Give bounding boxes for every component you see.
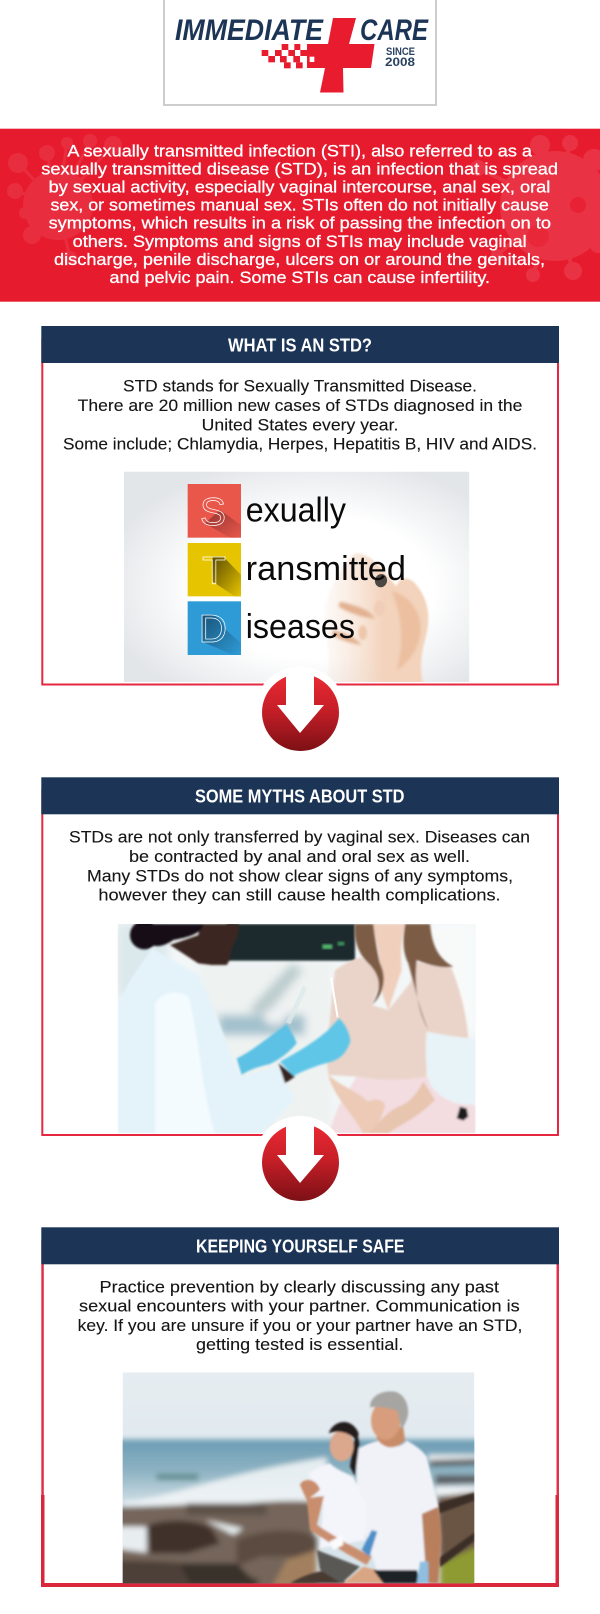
banner background	[0, 129, 600, 302]
logo	[164, 0, 436, 105]
hand	[325, 553, 428, 683]
woman	[350, 1433, 359, 1477]
intro banner	[0, 129, 600, 302]
block letters: S	[200, 491, 226, 534]
logo since: SINCE	[386, 46, 415, 58]
acronym words: exually	[246, 492, 346, 530]
panel heading bar	[41, 326, 559, 363]
panel text: Practice prevention by clearly discussing any past	[100, 1278, 499, 1296]
panel text	[69, 829, 530, 905]
panel text	[63, 378, 537, 454]
T block	[188, 543, 241, 596]
acronym words: iseases	[246, 608, 355, 646]
panel text: There are 20 million new cases of STDs diagnosed in the	[78, 397, 522, 415]
patient	[327, 924, 476, 1133]
arrow down 2	[254, 1116, 346, 1209]
panel text	[78, 1278, 522, 1354]
block letters	[201, 497, 226, 642]
panel text: United States every year.	[202, 416, 398, 434]
intro paragraph: and pelvic pain. Some STIs can cause infertility.	[110, 269, 490, 287]
logo red cross	[307, 18, 374, 92]
S block	[188, 484, 241, 538]
photo: couple by the sea	[113, 1372, 483, 1590]
virus left	[7, 134, 122, 265]
virus right	[470, 135, 600, 282]
panel outline	[42, 790, 558, 1135]
panel heading: KEEPING YOURSELF SAFE	[196, 1235, 404, 1256]
monitor	[227, 924, 355, 961]
intro paragraph: symptoms, which results in a risk of passing the infection on to	[49, 215, 551, 233]
intro paragraph: sexually transmitted disease (STD), is an infection that is spread	[41, 160, 558, 178]
panel text: STDs are not only transferred by vaginal sex. Diseases can	[69, 829, 530, 847]
intro paragraph: by sexual activity, especially vaginal intercourse, anal sex, oral	[49, 178, 550, 196]
panel text: STD stands for Sexually Transmitted Disease.	[123, 378, 477, 396]
logo frame	[164, 0, 436, 105]
panel text: getting tested is essential.	[196, 1336, 403, 1354]
block letters: T	[202, 550, 226, 593]
panel lower outline	[41, 1495, 559, 1587]
panel text: be contracted by anal and oral sex as well.	[129, 848, 470, 866]
intro paragraph: sex, or sometimes manual sex. STIs often do not initially cause	[50, 197, 549, 215]
logo wordmark: care: CARE	[360, 14, 429, 47]
panel heading: WHAT IS AN STD?	[228, 335, 372, 356]
photo: STD acronym with hand	[124, 472, 469, 683]
panel: keeping yourself safe	[41, 1227, 559, 1590]
intro paragraph: others. Symptoms and signs of STIs may include vaginal	[73, 233, 527, 251]
photo: doctor and patient	[118, 921, 476, 1133]
panel: what is an STD	[41, 326, 559, 684]
panel heading bar	[41, 1227, 559, 1264]
swab	[331, 977, 338, 1017]
panel text: key. If you are unsure if you or your partner have an STD,	[78, 1317, 522, 1335]
logo checker pattern	[262, 44, 314, 68]
D block	[188, 601, 241, 655]
arrow down 1	[254, 666, 346, 758]
panel text: Some include; Chlamydia, Herpes, Hepatitis B, HIV and AIDS.	[63, 436, 537, 454]
panel text: however they can still cause health complications.	[98, 887, 501, 905]
intro paragraph: A sexually transmitted infection (STI), also referred to as a	[67, 142, 533, 160]
intro paragraph: discharge, penile discharge, ulcers on or around the genitals,	[54, 251, 545, 269]
logo wordmark: immediate: IMMEDIATE	[175, 14, 324, 47]
panel: some myths about STD	[41, 777, 559, 1135]
acronym words: ransmitted	[246, 550, 406, 588]
panel outline	[41, 1240, 559, 1495]
panel heading bar	[41, 777, 559, 814]
log and legs	[290, 1570, 347, 1583]
panel text: Many STDs do not show clear signs of any symptoms,	[87, 867, 513, 885]
panel text: sexual encounters with your partner. Communication is	[79, 1298, 520, 1316]
panel outline	[42, 340, 558, 684]
marker tip	[374, 574, 388, 588]
block letters: D	[199, 608, 227, 651]
panel heading: SOME MYTHS ABOUT STD	[195, 786, 404, 807]
doctor	[118, 921, 350, 1133]
man	[422, 1505, 442, 1583]
logo year: 2008	[385, 55, 415, 69]
intro paragraph	[41, 142, 558, 287]
acronym words	[246, 492, 406, 646]
